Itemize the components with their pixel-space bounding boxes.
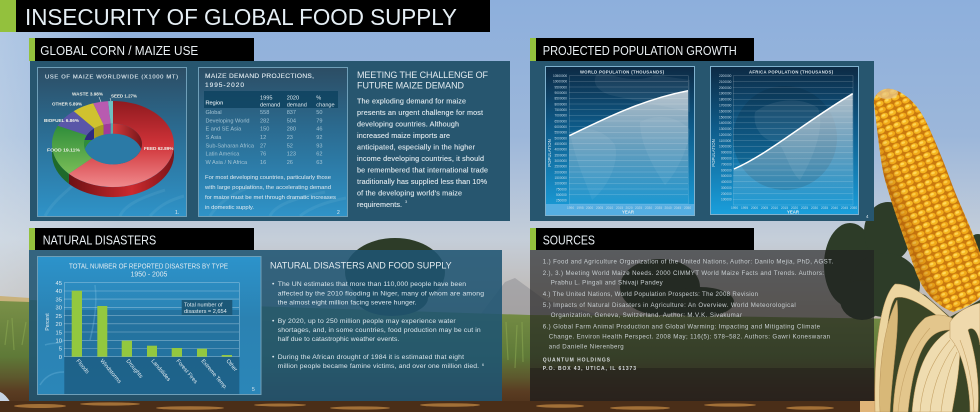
donut labels: [44, 92, 174, 152]
world chart x axis: 1990: [567, 206, 574, 210]
panel: sources: 2.), 3.) Meeting World Maize Needs. 2000 CIMMYT World Maize Facts and Trends. Authors:: [543, 270, 824, 277]
world chart x axis: 2005: [596, 206, 603, 210]
africa chart x axis: 2020: [791, 206, 798, 210]
africa chart x axis: 2000: [751, 206, 758, 210]
bar labels: Landslides: [149, 358, 171, 383]
africa chart x axis: 2015: [781, 206, 788, 210]
y axis labels: [45, 281, 62, 361]
africa chart x axis: 2005: [761, 206, 768, 210]
chart: world population: [546, 66, 694, 216]
text block: natural disasters and food supply: affected by the 2010 flooding in Niger, many of whom are among: [278, 290, 484, 298]
text block: meeting the challenge: traditionally has supplied less than 10%: [357, 177, 488, 186]
text block: meeting the challenge: presents an urgent challenge for most: [357, 108, 483, 117]
africa chart y axis: 1300000: [719, 127, 732, 131]
table note: for maize must be met through dramatic increases: [205, 195, 336, 201]
y axis labels: 20: [56, 322, 62, 328]
table rows: 837: [287, 110, 296, 116]
africa chart y axis: 800000: [721, 156, 732, 160]
world chart x axis: 2020: [626, 206, 633, 210]
text block: meeting the challenge: income developing countries, it should: [357, 154, 484, 163]
table rows: 50: [316, 110, 323, 116]
world chart x axis: 2025: [635, 206, 642, 210]
table rows: W Asia / N Africa: [206, 160, 248, 166]
chart: world population: WORLD POPULATION (THOUSANDS): [580, 70, 665, 74]
africa chart x axis: 1990: [731, 206, 738, 210]
panel: projected population growth: 4: [866, 214, 869, 219]
table note: with large populations, the accelerating demand: [204, 185, 331, 191]
text block: meeting the challenge: of the developing world's maize: [357, 188, 462, 198]
world chart y axis: 6000000: [554, 125, 567, 129]
africa chart y axis: POPULATION: [711, 139, 716, 167]
bar labels: [74, 358, 238, 391]
panel: donut chart of maize use: 1.: [175, 210, 179, 216]
world chart y axis: 500000: [556, 193, 567, 197]
africa chart y axis: 200000: [721, 192, 732, 196]
chart: disasters by type: [38, 256, 261, 394]
world chart y axis: 9500000: [554, 85, 567, 89]
table rows: 12: [260, 135, 266, 141]
text block: meeting the challenge: developing countries. Although: [357, 120, 459, 128]
panel: sources: Change. Environ Health Perspect. 2008 May; 116(5): 578–582. Authors: Gawri Koneswaran: [549, 334, 830, 340]
table rows: E and SE Asia: [206, 127, 242, 133]
africa chart y axis: 1000000: [719, 145, 732, 149]
world chart x axis: 2045: [674, 206, 681, 210]
world chart x axis: 2015: [616, 206, 623, 210]
donut labels: BIOFUEL 6.86%: [44, 118, 79, 123]
world chart y axis: 2500000: [554, 165, 567, 169]
panel: sources: P.O. BOX 43, UTICA, IL 61373: [543, 366, 636, 372]
text block: meeting the challenge: FUTURE MAIZE DEMAND: [357, 80, 464, 90]
chart: disasters by type: TOTAL NUMBER OF REPORTED DISASTERS BY TYPE: [69, 263, 228, 270]
donut labels: SEED 1.27%: [111, 94, 137, 98]
world chart y axis: 4500000: [554, 142, 567, 146]
y axis labels: 15: [56, 330, 62, 336]
callout: total number of disasters: Total number of: [184, 302, 223, 308]
africa chart x axis: 2050: [850, 206, 857, 210]
world chart y axis: 8500000: [554, 97, 567, 101]
africa chart y axis: 300000: [721, 186, 732, 190]
bar labels: Floods: [74, 358, 90, 375]
panel: sources: 6.) Global Farm Animal Production and Global Warming: Impacting and Mitigating Climate: [543, 324, 821, 330]
donut slice: feed: [69, 101, 174, 187]
africa chart y axis: 1500000: [719, 115, 732, 119]
chart: africa population: [710, 66, 858, 214]
text block: natural disasters and food supply: •: [272, 281, 275, 288]
africa chart x axis: 2035: [821, 206, 828, 210]
panel: global corn and maize use: [30, 61, 510, 221]
line: africa population curve: [734, 94, 853, 169]
africa chart y axis: 600000: [721, 168, 732, 172]
panel: projected population growth: [530, 61, 874, 221]
title bar: INSECURITY OF GLOBAL FOOD SUPPLY: [25, 4, 457, 30]
africa chart y axis: 400000: [721, 180, 732, 184]
text block: natural disasters and food supply: half due to catastrophic weather events.: [278, 336, 399, 343]
table rows: 79: [316, 118, 323, 124]
panel: sources: and Danielle Nierenberg: [549, 344, 624, 350]
world chart x axis: 1995: [576, 206, 584, 210]
donut slice: waste: [93, 101, 111, 125]
donut labels: FEED 62.89%: [144, 146, 174, 151]
world chart y axis: 5500000: [554, 131, 567, 135]
y axis labels: 35: [56, 297, 62, 303]
table rows: 27: [260, 143, 266, 149]
africa chart y axis: [711, 74, 732, 202]
text block: natural disasters and food supply: [270, 260, 484, 370]
africa chart x axis: 1995: [741, 206, 748, 210]
bar labels: Extreme Temp.: [199, 358, 228, 391]
table header: %: [316, 95, 321, 101]
table rows: 63: [316, 160, 323, 166]
africa chart x axis: 2040: [831, 206, 838, 210]
text block: natural disasters and food supply: By 2020, up to 250 million people may experience water: [278, 318, 456, 325]
table note: [204, 175, 336, 211]
africa chart y axis: 1400000: [719, 121, 732, 125]
text block: meeting the challenge: requirements.: [357, 200, 402, 209]
panel: donut chart of maize use: [38, 68, 186, 216]
line: world population curve: [569, 91, 688, 136]
table rows: 46: [316, 127, 323, 133]
text block: meeting the challenge: [357, 70, 488, 209]
table header: demand: [260, 102, 280, 108]
world chart x axis: 2050: [684, 206, 691, 210]
table rows: 76: [260, 152, 266, 158]
africa chart y axis: 100000: [721, 198, 732, 202]
text block: natural disasters and food supply: shortages, and, in some countries, food production may be cut in: [278, 327, 481, 334]
africa chart x axis: 2030: [811, 206, 818, 210]
corn cob: [874, 88, 980, 312]
text block: meeting the challenge: The exploding demand for maize: [357, 96, 466, 106]
y axis labels: 25: [56, 314, 62, 320]
callout: total number of disasters: [182, 300, 232, 315]
husk strips: [860, 284, 980, 412]
text block: natural disasters and food supply: million people became famine victims, and over one million died.: [278, 363, 479, 370]
panel: sources: [530, 250, 874, 401]
panel: donut chart of maize use: USE OF MAIZE WORLDWIDE (X1000 MT): [45, 74, 178, 80]
world chart x axis: 2035: [655, 206, 662, 210]
table rows: 280: [287, 127, 296, 133]
table rows: 504: [287, 118, 296, 124]
table header: change: [316, 102, 335, 108]
table rows: 52: [287, 143, 293, 149]
text block: meeting the challenge: 3: [405, 199, 408, 204]
world chart y axis: 4000000: [554, 148, 567, 152]
africa chart y axis: 1700000: [719, 104, 732, 108]
y axis labels: 10: [56, 338, 62, 344]
table header: 2020: [287, 95, 299, 101]
table rows: Developing World: [206, 118, 250, 124]
donut slice: biofuel: [58, 111, 94, 135]
world chart y axis: POPULATION: [547, 139, 552, 167]
panel: sources: 5.) Impacts of Natural Disasters in Agriculture: An Overview. World Meteorological: [543, 302, 796, 309]
section header: projected population growth: PROJECTED POPULATION GROWTH: [543, 43, 737, 58]
bar labels: Windstorms: [98, 358, 122, 385]
africa chart y axis: 1600000: [719, 109, 732, 113]
y axis labels: 40: [56, 289, 62, 295]
table rows: 123: [287, 152, 296, 158]
panel: maize demand projections table: 1995-2020: [205, 82, 244, 89]
y axis labels: 5: [59, 347, 62, 353]
table rows: 26: [287, 160, 293, 166]
world chart y axis: 7000000: [554, 114, 567, 118]
world chart x axis: [567, 206, 691, 214]
text block: meeting the challenge: increased maize imports are: [357, 131, 450, 140]
y axis labels: Percent: [45, 313, 51, 331]
section header: natural disasters: [29, 228, 254, 250]
table rows: 558: [260, 110, 269, 116]
table rows: Latin America: [206, 152, 240, 158]
husk shadow base: [875, 284, 980, 412]
panel: sources: Prabhu L. Pingali and Shivaji Pandey: [551, 280, 664, 286]
section header: global corn / maize use: GLOBAL CORN / MAIZE USE: [40, 43, 199, 58]
world chart y axis: 10000000: [553, 80, 567, 84]
callout: total number of disasters: disasters = 2,654: [184, 309, 227, 315]
text block: natural disasters and food supply: During the African drought of 1984 it is estimated that eight: [278, 354, 464, 361]
world chart y axis: 10500000: [553, 74, 567, 78]
africa chart x axis: [731, 206, 857, 214]
africa chart x axis: 2025: [801, 206, 808, 210]
world chart y axis: 2000000: [554, 170, 567, 174]
africa chart y axis: 1100000: [719, 139, 731, 143]
text block: natural disasters and food supply: The UN estimates that more than 110,000 people have been: [278, 281, 466, 288]
africa chart y axis: 1900000: [719, 92, 732, 96]
text block: natural disasters and food supply: 6: [482, 363, 484, 367]
donut side walls: [52, 144, 174, 197]
text block: meeting the challenge: MEETING THE CHALLENGE OF: [357, 70, 488, 80]
world chart x axis: 2000: [586, 206, 593, 210]
world chart y axis: [547, 74, 567, 203]
world chart y axis: 750000: [556, 187, 567, 191]
table rows: 282: [260, 118, 269, 124]
table rows: Sub-Saharan Africa: [206, 143, 255, 149]
africa chart x axis: 2045: [841, 206, 848, 210]
africa chart y axis: 1200000: [719, 133, 732, 137]
donut slice: food: [52, 126, 92, 174]
panel: maize demand projections table: MAIZE DEMAND PROJECTIONS,: [205, 73, 314, 80]
text block: meeting the challenge: be remembered that international trade: [357, 166, 488, 174]
table note: For most developing countries, particularly those: [205, 175, 332, 181]
bar labels: Forest Fires: [174, 358, 198, 385]
world chart y axis: 1000000: [554, 182, 567, 186]
africa chart y axis: 700000: [721, 162, 732, 166]
table rows: 93: [316, 143, 323, 149]
world chart x axis: YEAR: [622, 210, 635, 214]
table header: Region: [206, 101, 223, 107]
section header: projected population growth: [530, 38, 754, 61]
panel: sources: 1.) Food and Agriculture Organization of the United Nations, Author: Danilo Mejia, PhD, AGST.: [543, 258, 834, 266]
donut slice: other: [74, 103, 104, 128]
panel: maize demand projections table: [198, 68, 348, 216]
bars: [72, 291, 232, 357]
world chart y axis: 6500000: [554, 119, 567, 123]
text block: natural disasters and food supply: NATURAL DISASTERS AND FOOD SUPPLY: [270, 260, 452, 271]
y axis labels: 45: [56, 281, 62, 287]
world chart y axis: 5000000: [554, 136, 567, 140]
world chart y axis: 250000: [556, 199, 567, 203]
text block: natural disasters and food supply: the almost eight million facing severe hunger.: [278, 300, 417, 306]
table rows: Global: [206, 110, 222, 116]
table rows: [206, 110, 323, 166]
world chart y axis: 3000000: [554, 159, 567, 163]
y axis labels: 0: [59, 355, 62, 361]
table rows: 62: [316, 152, 323, 158]
table header: [204, 91, 338, 108]
section header: sources: [530, 228, 754, 250]
text block: meeting the challenge: anticipated, especially in the higher: [357, 142, 476, 152]
donut labels: OTHER 5.89%: [52, 102, 82, 106]
table header: 1995: [260, 95, 272, 101]
bar labels: Other: [224, 358, 238, 373]
africa chart y axis: 500000: [721, 174, 732, 178]
panel: sources: 4.) The United Nations, World Population Prospects: The 2008 Revision: [543, 291, 758, 298]
africa chart y axis: 2000000: [719, 86, 732, 90]
table rows: 92: [316, 135, 323, 141]
world chart x axis: 2040: [664, 206, 672, 210]
donut hole with inner walls: [84, 124, 142, 164]
world chart y axis: 7500000: [554, 108, 567, 112]
illustration: ear of corn with husk: [860, 80, 980, 412]
africa chart y axis: 2100000: [719, 80, 732, 84]
text block: natural disasters and food supply: •: [272, 318, 275, 325]
africa chart x axis: YEAR: [787, 210, 800, 214]
table rows: 150: [260, 127, 269, 133]
section header: global corn / maize use: [29, 38, 254, 61]
donut slice: seed: [108, 101, 113, 124]
africa chart y axis: 2200000: [719, 74, 732, 78]
africa chart y axis: 1800000: [719, 98, 732, 102]
table rows: 23: [287, 135, 293, 141]
panel: sources: Organization, Geneva, Switzerland. Author: M.V.K. Sivakumar: [551, 312, 742, 319]
table rows: 16: [260, 160, 266, 166]
world chart x axis: 2030: [645, 206, 652, 210]
text block: natural disasters and food supply: •: [272, 354, 275, 361]
donut labels: WASTE 3.98%: [72, 92, 103, 96]
chart: disasters by type: 5: [252, 387, 255, 393]
chart: africa population: AFRICA POPULATION (THOUSANDS): [749, 70, 834, 74]
world chart y axis: 1500000: [554, 176, 567, 180]
chart: disasters by type: 1950 - 2005: [131, 272, 168, 279]
y axis labels: 30: [56, 306, 62, 312]
section header: natural disasters: NATURAL DISASTERS: [43, 232, 156, 247]
table header: demand: [287, 102, 307, 108]
table rows: S Asia: [206, 135, 222, 141]
panel: sources: QUANTUM HOLDINGS: [543, 358, 611, 364]
africa chart x axis: 2010: [771, 206, 778, 210]
world chart y axis: 8000000: [554, 102, 567, 106]
panel: maize demand projections table: 2: [337, 210, 340, 216]
section header: sources: SOURCES: [543, 232, 595, 247]
table note: in domestic supply.: [205, 205, 254, 211]
panel: natural disasters: [29, 250, 502, 401]
world chart y axis: 3500000: [554, 153, 567, 157]
world chart x axis: 2010: [606, 206, 613, 210]
world chart y axis: 9000000: [554, 91, 567, 95]
donut labels: FOOD 19.11%: [47, 148, 80, 152]
bar labels: Droughts: [124, 358, 144, 380]
africa chart y axis: 900000: [721, 151, 732, 155]
